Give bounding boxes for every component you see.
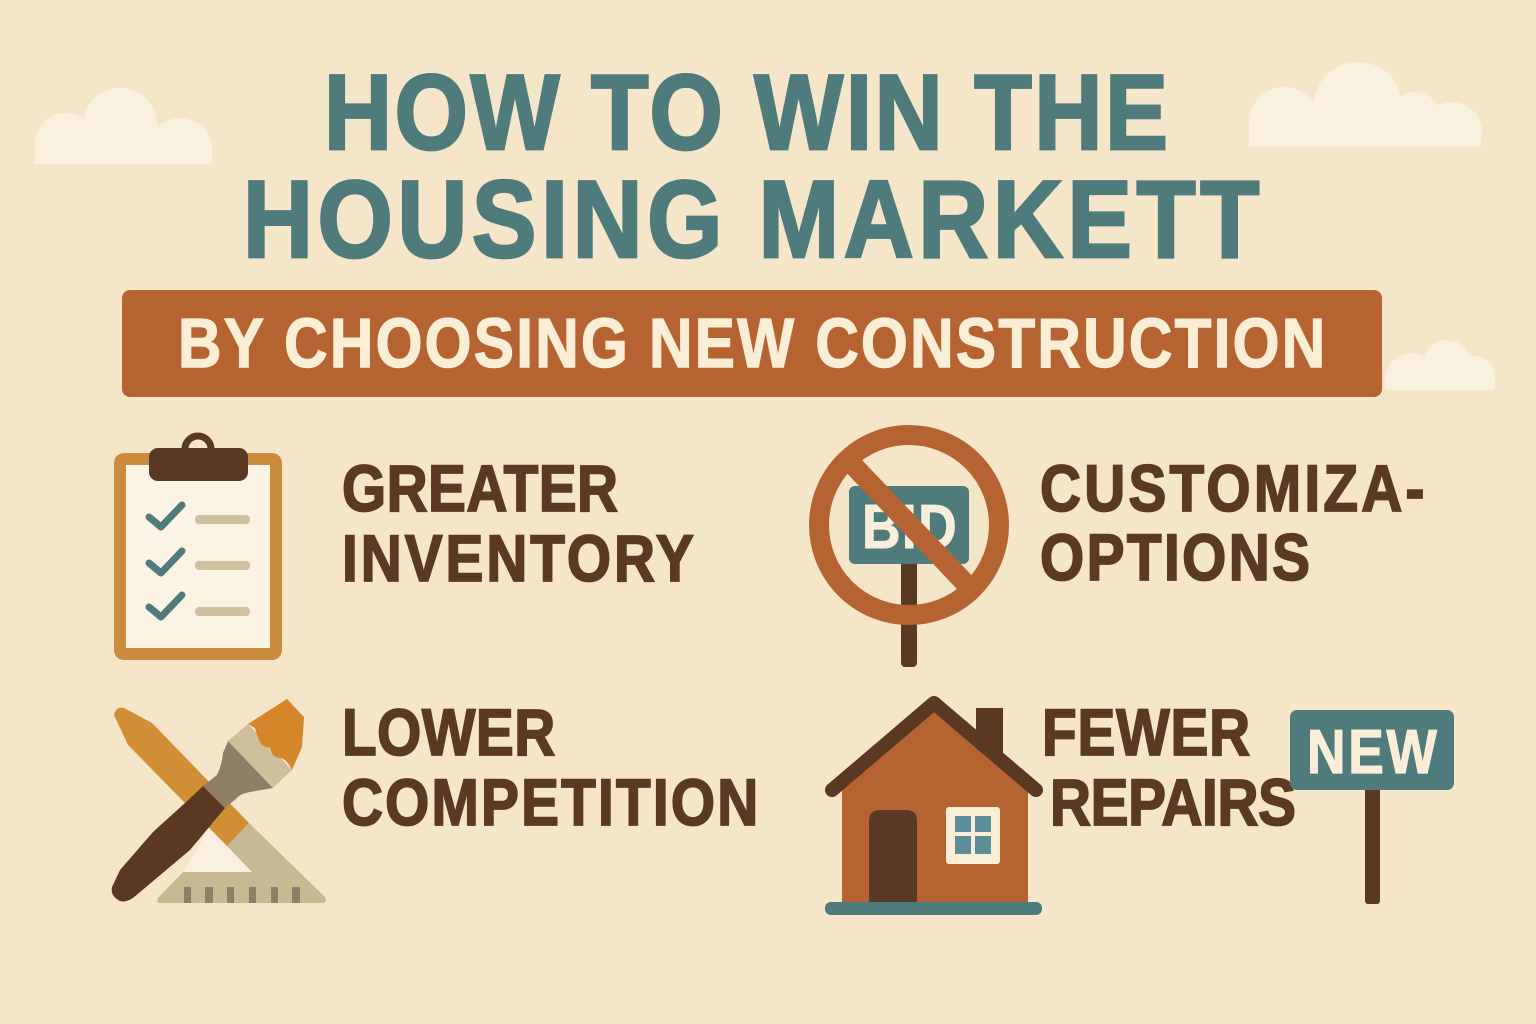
title xyxy=(243,53,1259,280)
text: customization options: OPTIONS xyxy=(1040,521,1310,595)
text: greater inventory: INVENTORY xyxy=(342,522,694,596)
text: lower competition xyxy=(342,696,758,840)
text: fewer repairs: REPAIRS xyxy=(1050,766,1296,840)
icon: new sign xyxy=(1290,710,1454,904)
banner: subtitle: BY CHOOSING NEW CONSTRUCTION xyxy=(178,304,1325,382)
icon: clipboard checklist xyxy=(114,436,282,660)
banner: subtitle xyxy=(122,290,1382,397)
icon: house xyxy=(825,703,1042,915)
text: customization options: CUSTOMIZA- xyxy=(1040,452,1424,526)
title: HOUSING MARKETT xyxy=(243,157,1259,280)
icon: no bidding sign: BID xyxy=(862,493,957,562)
title: HOW TO WIN THE xyxy=(324,53,1168,172)
text: greater inventory xyxy=(342,452,694,596)
cloud: right small xyxy=(1385,340,1495,390)
text: greater inventory: GREATER xyxy=(342,452,618,526)
text: fewer repairs xyxy=(1042,696,1296,840)
text: lower competition: LOWER xyxy=(342,696,555,770)
cloud: top right xyxy=(1249,62,1482,147)
text: lower competition: COMPETITION xyxy=(342,766,758,840)
icon: new sign: NEW xyxy=(1307,718,1437,787)
cloud: top left xyxy=(35,88,212,164)
text: customization options xyxy=(1040,452,1424,595)
icon: tools xyxy=(112,699,326,903)
icon: no bidding sign xyxy=(819,435,999,667)
text: fewer repairs: FEWER xyxy=(1042,696,1250,770)
